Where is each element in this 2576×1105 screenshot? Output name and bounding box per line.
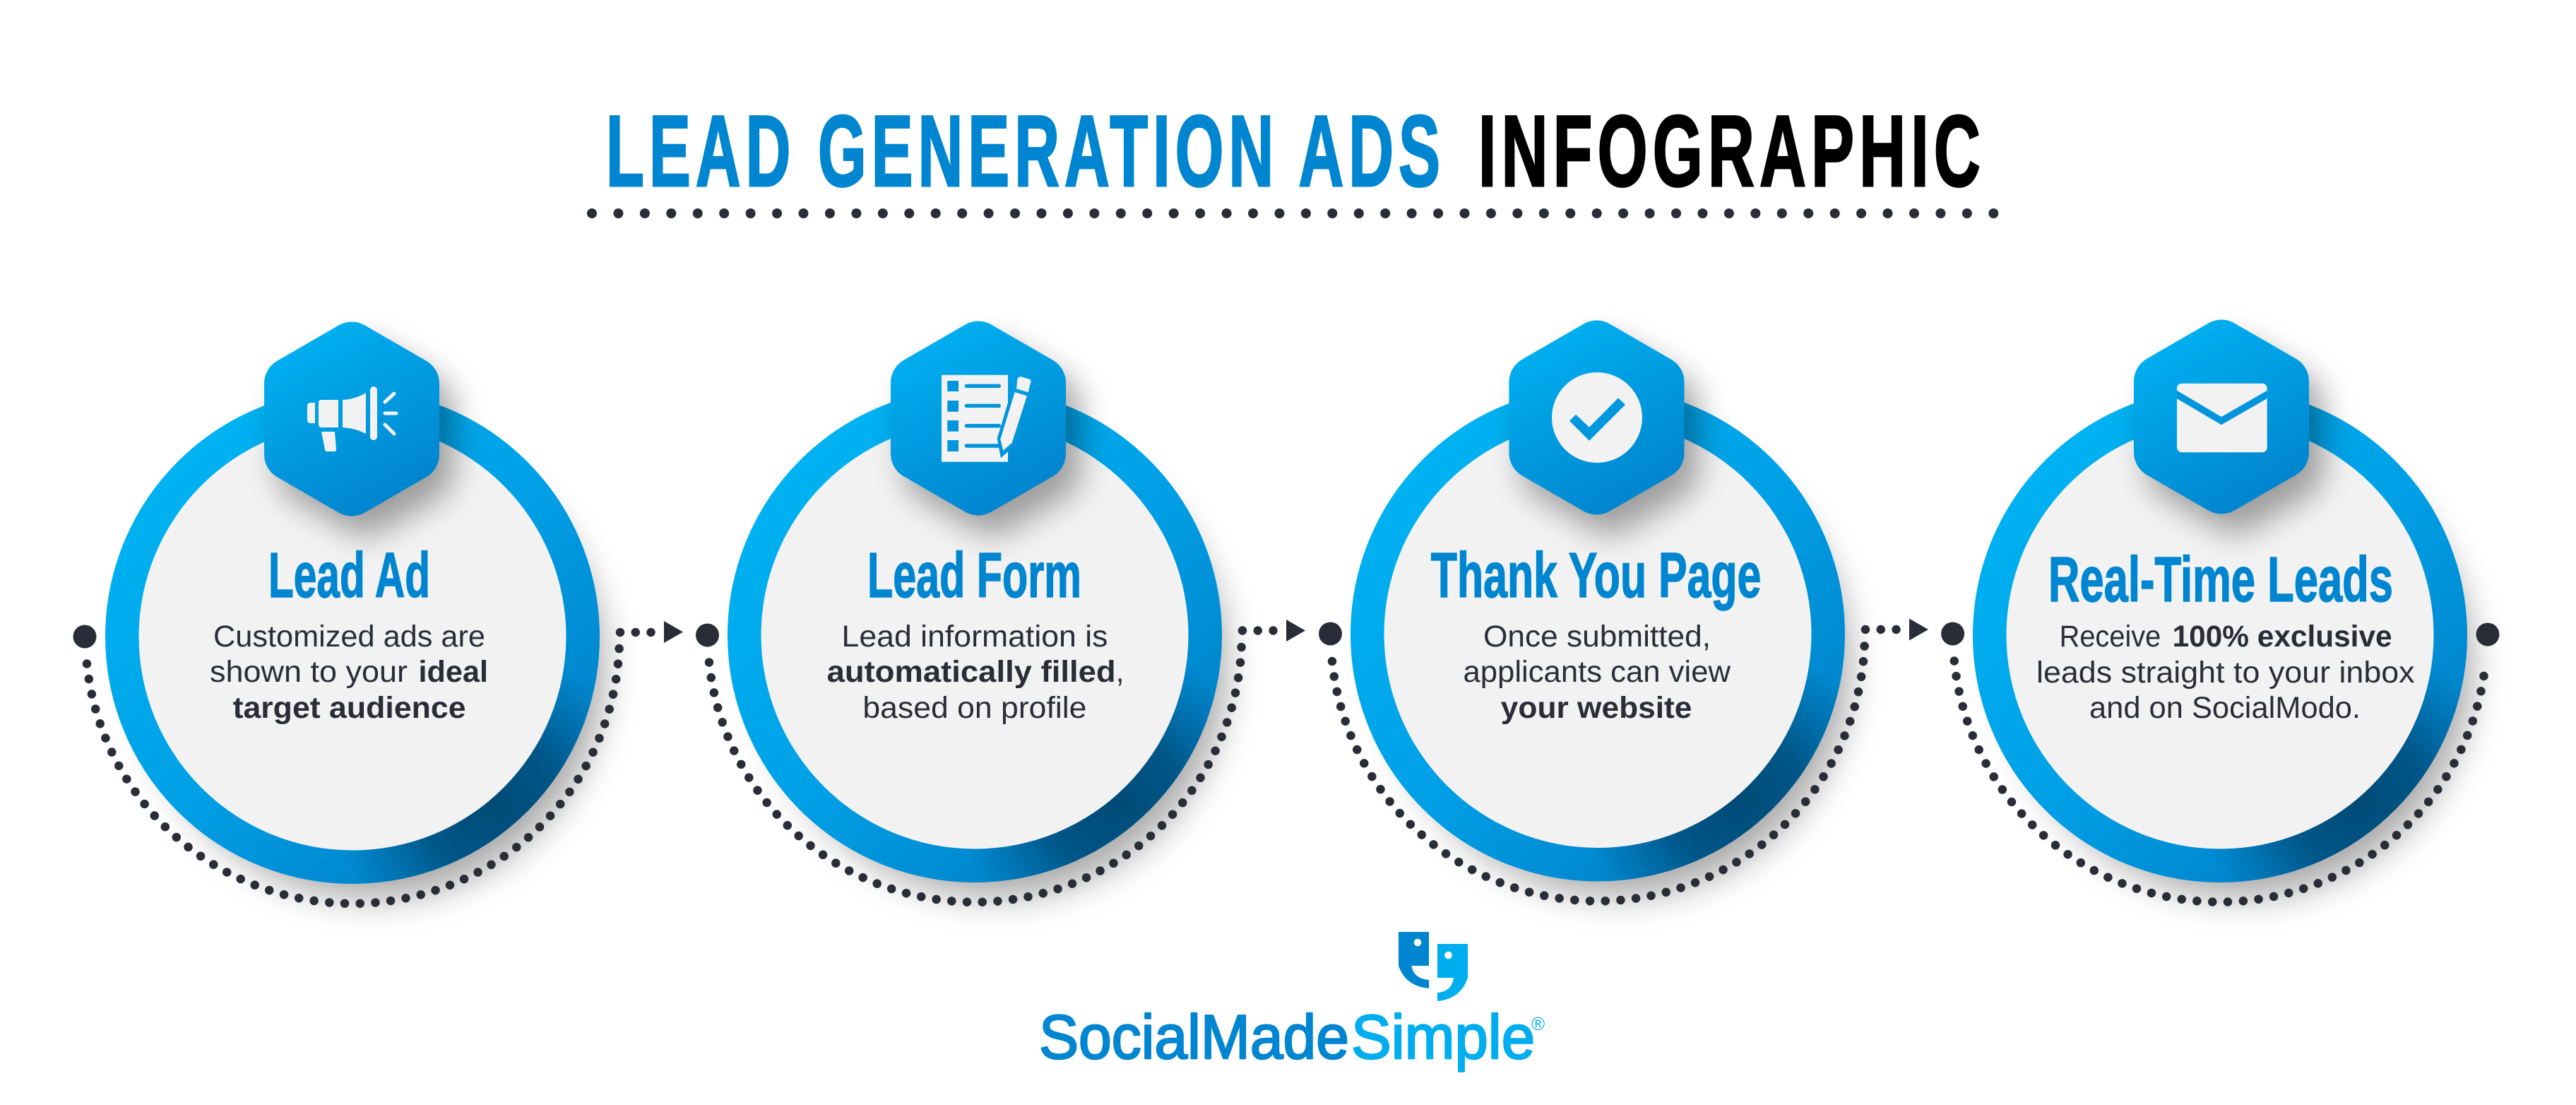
dotted arc with arrow to lead form <box>73 621 683 904</box>
dotted arc with arrow to thank you page <box>696 620 1305 902</box>
title dotted underline <box>592 208 1996 218</box>
description <box>2036 620 2415 725</box>
description: leads straight to your inbox <box>2036 656 2415 690</box>
icon: form and pencil <box>942 375 1031 462</box>
ring <box>744 405 1205 865</box>
logo: SocialMadeSimple <box>1039 932 1545 1072</box>
icon: envelope <box>2177 384 2267 452</box>
hexagon <box>1509 321 1684 514</box>
ring <box>122 406 583 867</box>
hexagon shadow <box>278 342 453 536</box>
hexagon shadow <box>905 341 1080 535</box>
logo wordmark: Simple <box>1351 1002 1535 1072</box>
inner circle <box>1384 420 1811 848</box>
hexagon shadow <box>2148 340 2323 533</box>
hexagon <box>264 322 439 516</box>
inner circle <box>2006 421 2434 849</box>
description: automatically filled <box>827 655 1116 689</box>
heading: Lead Form <box>867 540 1081 611</box>
hexagon shadow <box>1523 341 1698 534</box>
logo mark <box>1399 932 1468 1001</box>
inner circle <box>138 422 566 851</box>
description: target audience <box>233 691 466 725</box>
ring <box>1990 405 2450 865</box>
description: Receive <box>2060 620 2161 654</box>
panel: lead form <box>696 321 1305 902</box>
description: shown to your <box>210 655 408 689</box>
description: your website <box>1501 691 1692 725</box>
dotted arc <box>1941 622 2499 902</box>
title: INFOGRAPHIC <box>1478 95 1986 208</box>
logo wordmark <box>1039 1002 1535 1072</box>
description: Lead information is <box>842 620 1108 654</box>
hexagon <box>2134 320 2309 514</box>
heading: Real-Time Leads <box>2048 545 2393 615</box>
icon: check mark <box>1552 372 1642 463</box>
description: and on SocialModo. <box>2089 691 2361 725</box>
description: based on profile <box>862 691 1086 725</box>
icon: megaphone <box>307 386 396 451</box>
logo wordmark: SocialMade <box>1039 1002 1349 1072</box>
dotted arc with arrow to real-time leads <box>1319 619 1928 901</box>
description <box>1464 620 1731 725</box>
description <box>827 620 1124 725</box>
description <box>210 620 488 725</box>
inner circle <box>761 421 1188 849</box>
description: , <box>1116 655 1124 689</box>
panel: real-time leads <box>1941 320 2499 902</box>
heading: Thank You Page <box>1431 540 1761 611</box>
description: Once submitted, <box>1483 620 1711 654</box>
panel: lead ad <box>73 322 683 904</box>
description: ideal <box>418 655 488 689</box>
hexagon <box>891 321 1066 515</box>
panel: thank you page <box>1319 321 1928 901</box>
title: LEAD GENERATION ADS <box>606 95 1445 208</box>
ring <box>1367 404 1828 865</box>
description: 100% exclusive <box>2173 620 2392 654</box>
description: applicants can view <box>1464 655 1731 689</box>
registered mark: ® <box>1531 1013 1545 1034</box>
heading: Lead Ad <box>268 540 430 611</box>
description: Customized ads are <box>213 620 485 654</box>
